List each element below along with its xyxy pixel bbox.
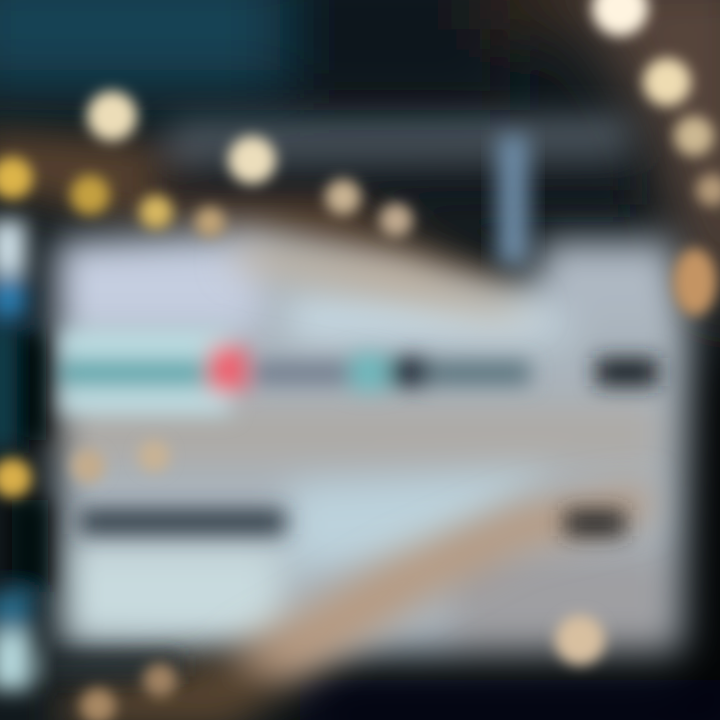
diagonal warm band	[60, 245, 650, 720]
main display panel	[55, 228, 690, 655]
brown ceiling band	[0, 122, 630, 320]
left edge strip	[0, 220, 180, 690]
vertical blue column	[497, 135, 529, 265]
row of coloured blocks	[60, 330, 658, 536]
